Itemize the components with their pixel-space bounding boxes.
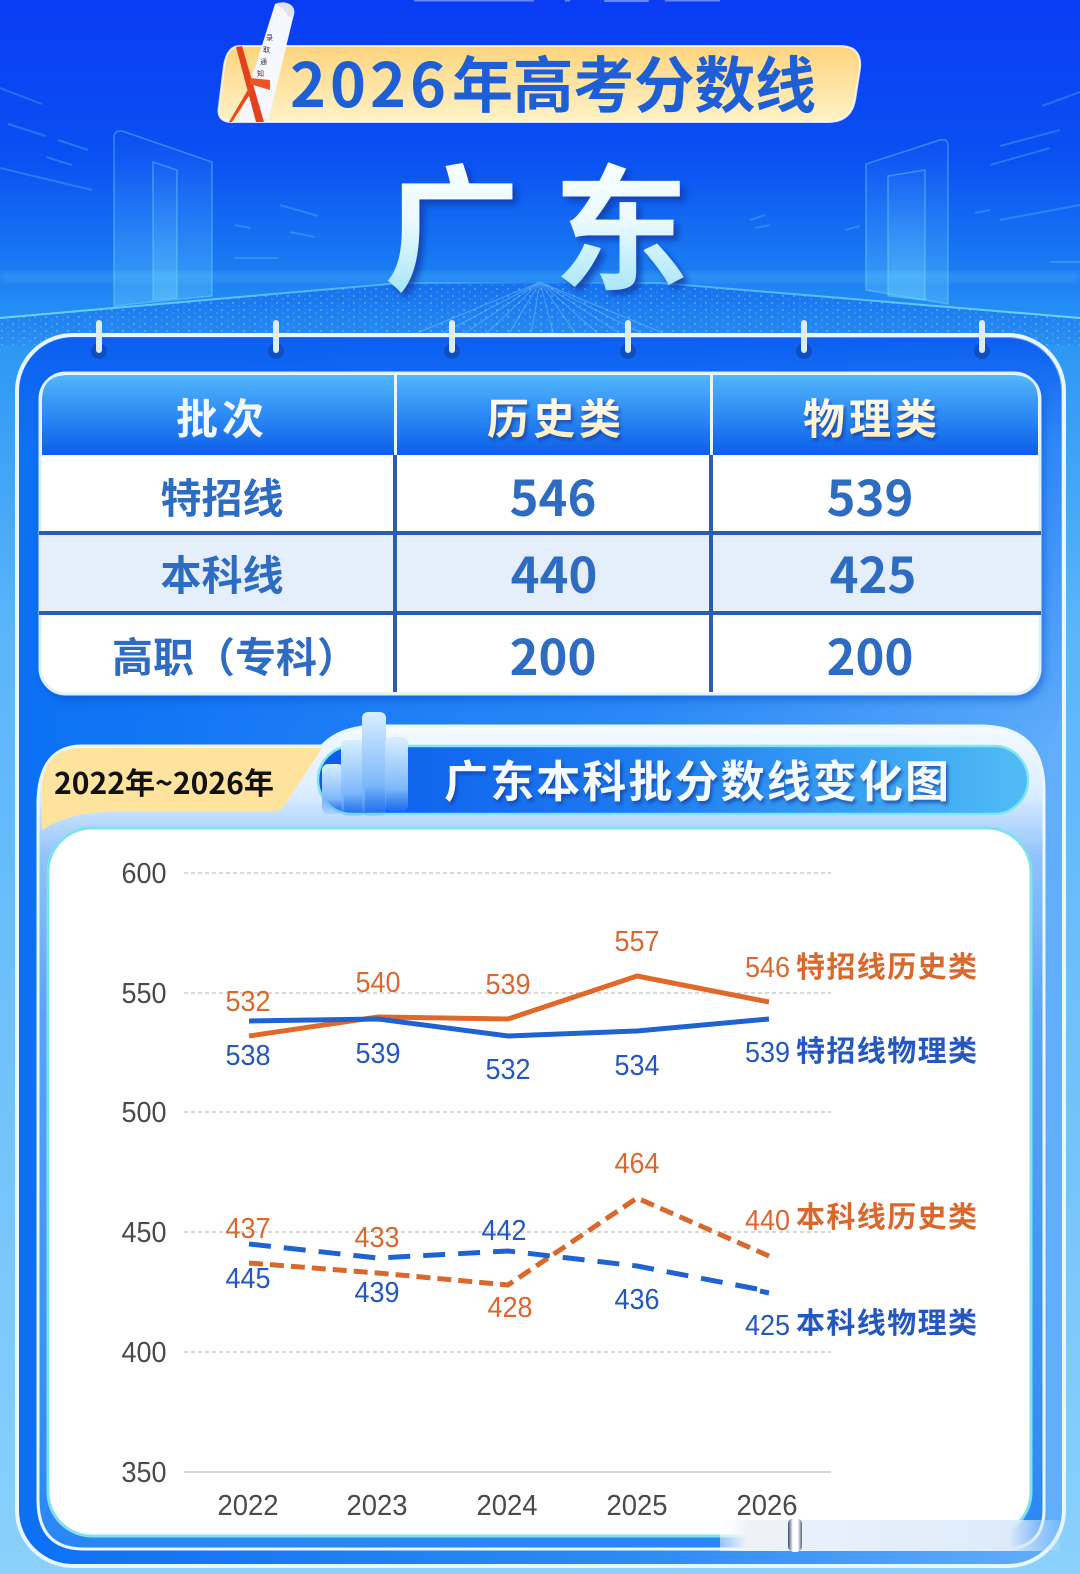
heading: 2026年高考分数线: 2026 <box>290 36 446 125</box>
data labels: 特招线历史类: 539 <box>486 969 530 1001</box>
row: 高职（专科）: 高职（专科） <box>112 624 358 684</box>
table header row: 批次 <box>176 386 268 447</box>
series label: 本科线历史类: 440 <box>745 1205 790 1237</box>
table header row: 历史类 <box>487 386 625 447</box>
icon: diploma scroll with ribbon: 通 <box>260 57 267 66</box>
line: 本科线物理类 <box>249 1244 769 1293</box>
heading: 广东: 广 <box>384 122 520 319</box>
data labels: 本科线历史类 <box>226 1148 660 1324</box>
chart card <box>48 828 1031 1536</box>
y axis and gridlines: 450 <box>122 1217 166 1249</box>
line: 特招线物理类 <box>249 1019 769 1036</box>
heading: 广东 <box>384 122 689 319</box>
data labels: 特招线历史类 <box>226 926 660 1018</box>
icon: diploma scroll with ribbon: 取 <box>263 46 270 54</box>
top cropped watermark <box>414 0 720 2</box>
row: 高职（专科） <box>112 619 913 690</box>
row: 特招线 <box>160 460 913 531</box>
series label: 本科线物理类: 本科线物理类 <box>796 1300 977 1342</box>
row: 特招线: 546 <box>510 460 596 531</box>
series label: 本科线物理类: 425 <box>745 1310 790 1342</box>
data labels: 特招线历史类: 557 <box>614 926 660 958</box>
data labels: 本科线历史类: 437 <box>226 1213 270 1245</box>
data labels: 本科线历史类: 428 <box>488 1292 532 1324</box>
main card <box>17 320 1064 1566</box>
data labels: 本科线物理类: 439 <box>354 1277 400 1309</box>
data labels: 特招线物理类: 538 <box>226 1040 270 1072</box>
binder rings <box>91 320 990 359</box>
data labels: 本科线历史类: 464 <box>614 1148 660 1180</box>
series label: 特招线历史类: 546 <box>745 952 790 984</box>
tab: 2022年~2026年 <box>42 748 322 830</box>
x axis labels: 2026 <box>736 1490 798 1522</box>
icon: diploma scroll with ribbon: 录 <box>266 34 273 42</box>
data labels: 特招线历史类: 540 <box>356 967 400 999</box>
table header row <box>42 375 1038 455</box>
row: 本科线: 440 <box>511 537 597 608</box>
heading: 广东: 东 <box>553 122 689 319</box>
row: 高职（专科）: 200 <box>827 619 913 690</box>
tab: 2022年~2026年: 2022年~2026年 <box>54 759 274 803</box>
data labels: 本科线历史类: 433 <box>354 1222 400 1254</box>
series label: 特招线历史类: 特招线历史类 <box>796 944 977 986</box>
title banner <box>219 36 860 125</box>
x axis labels <box>218 1490 798 1522</box>
x axis labels: 2024 <box>476 1490 538 1522</box>
data labels: 本科线物理类: 445 <box>226 1263 270 1295</box>
table <box>39 373 1041 694</box>
series label: 特招线物理类: 539 <box>745 1037 790 1069</box>
data labels: 特招线历史类: 532 <box>226 986 270 1018</box>
data labels: 特招线物理类 <box>226 1038 660 1086</box>
y axis and gridlines <box>122 858 831 1489</box>
series label: 特招线物理类: 特招线物理类 <box>796 1028 977 1070</box>
chart section panel <box>38 712 1044 1549</box>
x axis labels: 2025 <box>606 1490 668 1522</box>
heading: 2026年高考分数线: 年高考分数线 <box>452 36 816 125</box>
line: 特招线历史类 <box>249 976 769 1036</box>
row: 特招线: 特招线 <box>160 465 284 525</box>
y axis and gridlines: 350 <box>122 1457 166 1489</box>
x axis labels: 2022 <box>218 1490 278 1522</box>
building left <box>114 131 212 306</box>
row: 本科线: 本科线 <box>160 542 284 602</box>
icon: diploma scroll with ribbon: 知 <box>257 69 264 78</box>
blurred bottom right watermark <box>720 1518 1060 1552</box>
data labels: 本科线物理类: 442 <box>482 1215 526 1247</box>
data labels: 特招线物理类: 539 <box>356 1038 400 1070</box>
y axis and gridlines: 400 <box>122 1337 166 1369</box>
data labels: 特招线物理类: 534 <box>614 1050 660 1082</box>
row: 特招线: 539 <box>827 460 913 531</box>
y axis and gridlines: 500 <box>122 1097 166 1129</box>
title pill <box>318 712 1028 816</box>
row: 高职（专科）: 200 <box>510 619 596 690</box>
building right <box>866 140 948 304</box>
series label: 本科线历史类: 本科线历史类 <box>796 1194 977 1236</box>
x axis labels: 2023 <box>346 1490 408 1522</box>
y axis and gridlines: 600 <box>122 858 166 890</box>
heading: 广东本科批分数线变化图: 广东本科批分数线变化图 <box>444 746 949 810</box>
row: 本科线: 425 <box>830 537 916 608</box>
y axis and gridlines: 550 <box>122 978 166 1010</box>
data labels: 本科线物理类 <box>226 1215 660 1316</box>
icon: diploma scroll with ribbon <box>229 2 294 122</box>
icon: bar towers <box>322 712 408 816</box>
data labels: 特招线物理类: 532 <box>486 1054 530 1086</box>
data labels: 本科线物理类: 436 <box>614 1284 660 1316</box>
table header row: 物理类 <box>803 386 941 447</box>
row: 本科线 <box>160 537 916 608</box>
row: 本科线 background <box>40 535 1040 613</box>
line: 本科线历史类 <box>249 1198 769 1285</box>
